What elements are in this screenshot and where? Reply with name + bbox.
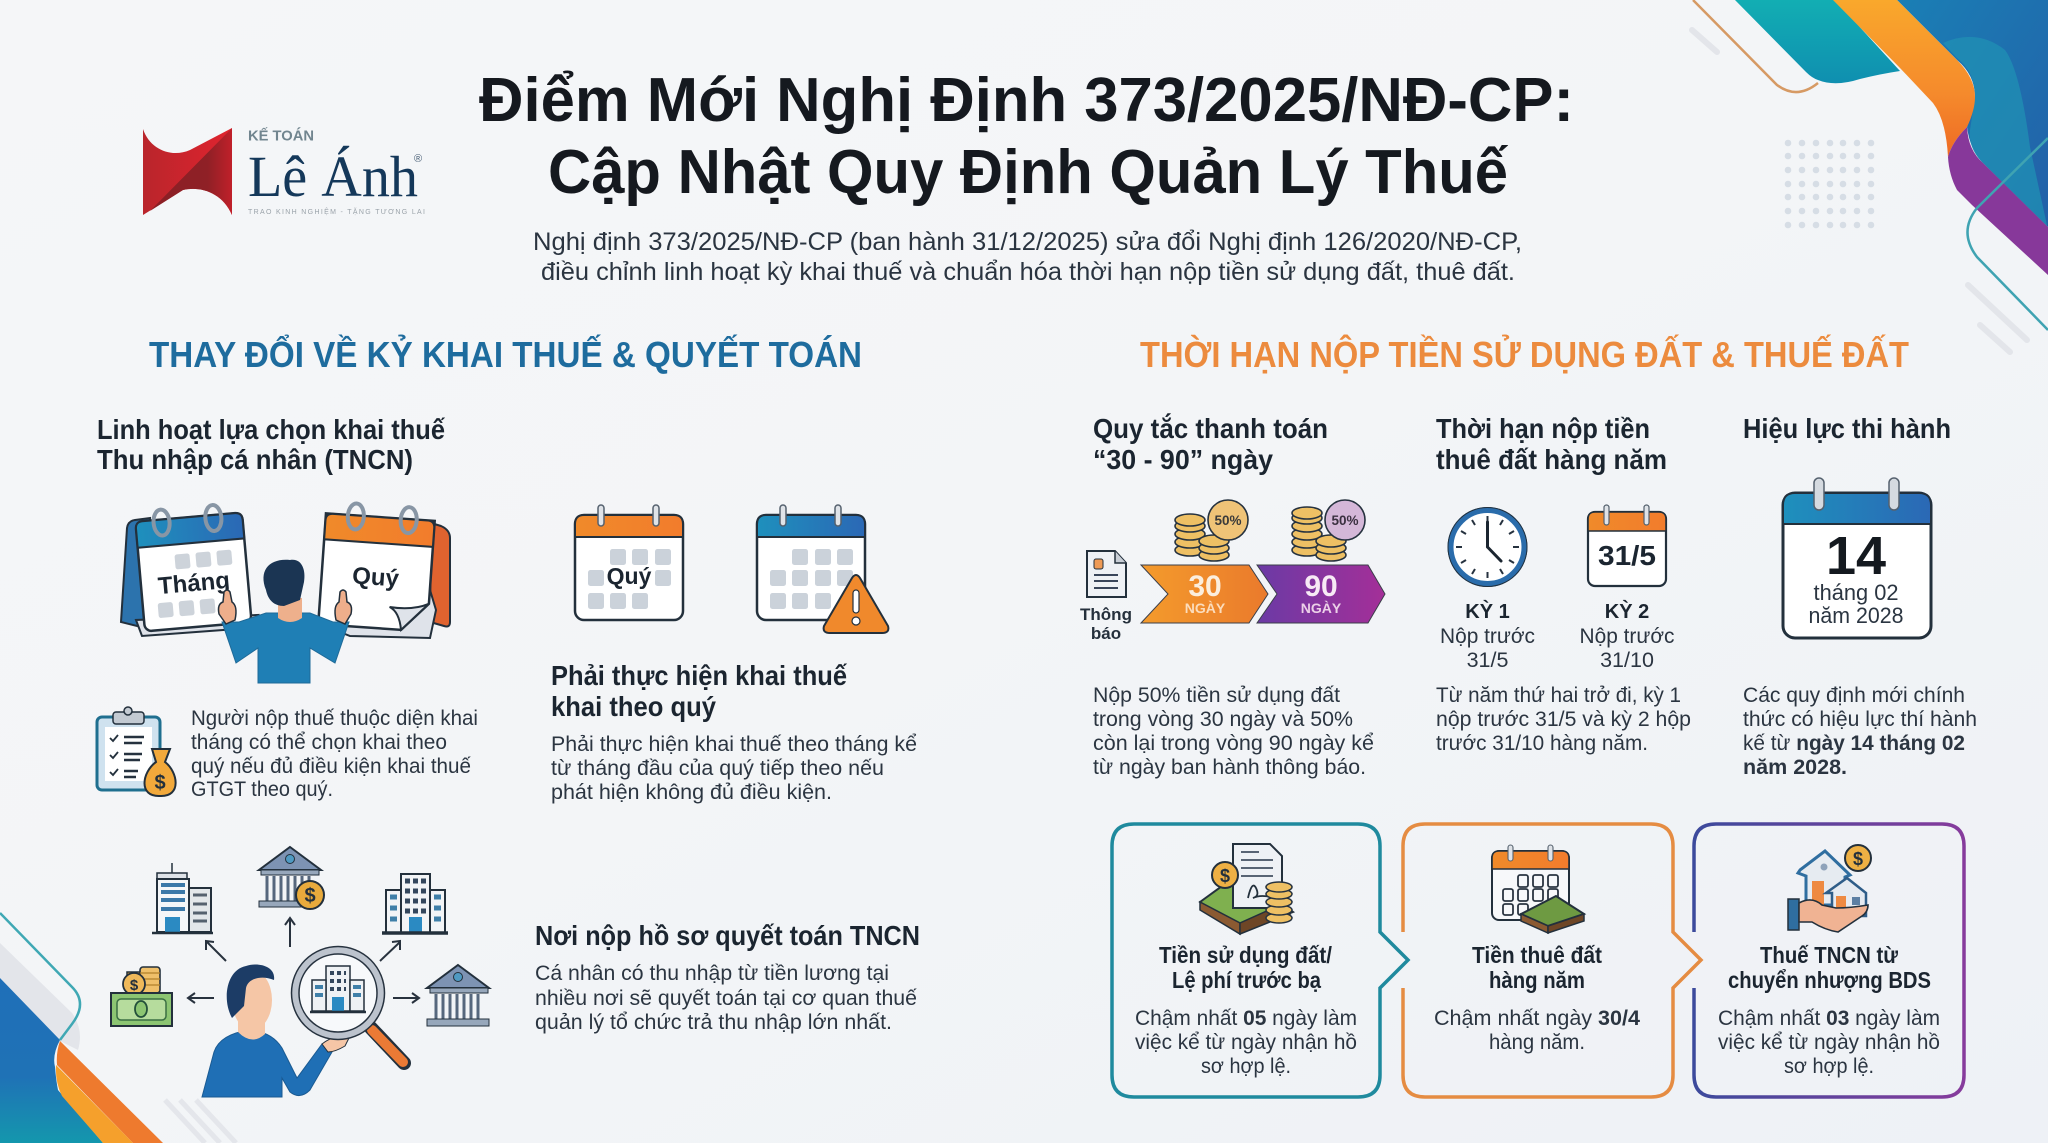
subtitle: điều chỉnh linh hoạt kỳ khai thuế và chuẩn hóa thời hạn nộp tiền sử dụng đất, thuê đất. <box>541 258 1515 286</box>
icon: bank with coin <box>259 847 324 909</box>
title: Cập Nhật Quy Định Quản Lý Thuế <box>548 138 1508 207</box>
icon: house on hand with coin <box>1788 845 1871 932</box>
icon: coins 50% second payment <box>1292 500 1365 561</box>
decoration: bottom-left corner shapes <box>0 913 236 1143</box>
panel: land use fee / registration fee: Chậm nhất 05 ngày làm <box>1135 1006 1357 1030</box>
icon: effective date calendar: tháng 02 <box>1814 580 1898 605</box>
panel: land use fee / registration fee <box>1112 824 1408 1097</box>
icon: house on hand with coin: $ <box>1853 849 1863 869</box>
block heading: 30-90 rule: “30 - 90” ngày <box>1093 444 1273 475</box>
title <box>479 66 1574 207</box>
panel: land use fee / registration fee: sơ hợp lệ. <box>1201 1054 1291 1078</box>
block heading: annual land rent deadline <box>1436 413 1667 475</box>
text: flexible filing description: GTGT theo quý. <box>191 777 333 801</box>
text: 30-90 rule description: còn lại trong vòng 90 ngày kể <box>1093 731 1374 755</box>
icon: cash and coins: $ <box>130 977 139 994</box>
icon: clock <box>1448 508 1527 586</box>
logo: Kế toán Lê Ánh: TRAO KINH NGHIỆM - TẶNG TƯƠNG LAI <box>248 207 425 216</box>
subtitle <box>533 228 1522 286</box>
labels: payment terms 1 and 2: 31/10 <box>1600 648 1654 672</box>
icon: bank <box>427 965 489 1026</box>
panel: annual land rent: hàng năm. <box>1489 1030 1585 1054</box>
logo: Kế toán Lê Ánh: ® <box>414 153 422 165</box>
block: must file monthly: từ tháng đầu của quý tiếp theo nếu <box>551 756 884 780</box>
panel: PIT from real estate transfer: chuyển nhượng BDS <box>1728 967 1931 993</box>
block: where to submit PIT settlement: nhiều nơi sẽ quyết toán tại cơ quan thuế <box>535 986 917 1010</box>
block: must file monthly: khai theo quý <box>551 691 716 722</box>
block heading: flexible PIT filing: Thu nhập cá nhân (TNCN) <box>97 444 413 475</box>
labels: payment terms 1 and 2 <box>1440 599 1675 672</box>
labels: payment terms 1 and 2: Nộp trước <box>1580 624 1675 648</box>
title: Điểm Mới Nghị Định 373/2025/NĐ-CP: <box>479 66 1574 135</box>
block: must file monthly <box>551 660 917 804</box>
icon: land, document and coins: $ <box>1220 866 1230 886</box>
block: must file monthly: Phải thực hiện khai thuế theo tháng kể <box>551 732 917 756</box>
decoration: dot grid <box>1785 140 1874 228</box>
block heading: annual land rent deadline: Thời hạn nộp tiền <box>1436 413 1650 444</box>
labels: payment terms 1 and 2: Nộp trước <box>1440 624 1535 648</box>
decoration: top-right corner shapes <box>1692 0 2048 352</box>
icon: effective date calendar <box>1783 478 1931 638</box>
text: effective date description: năm 2028. <box>1743 755 1847 779</box>
panel: PIT from real estate transfer <box>1694 824 1964 1097</box>
panel: PIT from real estate transfer: việc kể từ ngày nhận hồ <box>1718 1030 1940 1054</box>
text: 30-90 rule description: Nộp 50% tiền sử dụng đất <box>1093 683 1340 707</box>
icon: coins 50% second payment: 50% <box>1331 513 1359 528</box>
text: effective date description: kế từ ngày 14 tháng 02 <box>1743 731 1965 755</box>
block: must file monthly: Phải thực hiện khai thuế <box>551 660 847 691</box>
block heading: 30-90 rule: Quy tắc thanh toán <box>1093 413 1328 444</box>
text: flexible filing description: tháng có thể chọn khai theo <box>191 730 447 754</box>
block: where to submit PIT settlement: Nơi nộp hồ sơ quyết toán TNCN <box>535 920 920 951</box>
icon: office tower <box>152 863 213 933</box>
arrow: 30 days <box>1141 565 1268 623</box>
panel: land use fee / registration fee: việc kể từ ngày nhận hồ <box>1135 1030 1357 1054</box>
block: where to submit PIT settlement: quản lý tổ chức trả thu nhập lớn nhất. <box>535 1010 892 1034</box>
icon: coins 50% first payment <box>1175 500 1248 561</box>
block: must file monthly: phát hiện không đủ điều kiện. <box>551 780 832 804</box>
logo: Kế toán Lê Ánh: Lê Ánh <box>248 144 418 209</box>
text: flexible filing description: Người nộp thuế thuộc diện khai <box>191 706 478 730</box>
icon: quarter calendar <box>575 505 683 620</box>
panel: annual land rent: hàng năm <box>1489 967 1585 993</box>
panel: annual land rent <box>1403 824 1701 1097</box>
diagram: notice, 30 days and 90 days <box>1080 500 1385 643</box>
arrow: 90 days <box>1257 565 1385 623</box>
text: 30-90 rule description <box>1093 683 1374 779</box>
panel: PIT from real estate transfer: sơ hợp lệ. <box>1784 1054 1874 1078</box>
icon: effective date calendar: 14 <box>1826 526 1886 586</box>
icon: calendar 31/5 <box>1588 505 1666 586</box>
icon: quarter calendar: Quý <box>607 563 652 589</box>
panel: PIT from real estate transfer: Chậm nhất 03 ngày làm <box>1718 1006 1940 1030</box>
icon: checklist with money bag <box>97 707 176 796</box>
icon: land, document and coins <box>1200 844 1293 934</box>
panel: land use fee / registration fee: Lệ phí trước bạ <box>1172 967 1321 993</box>
icon: notice document: Thông <box>1080 605 1132 624</box>
arrow: 30 days: 30 <box>1188 570 1222 603</box>
arrow: 90 days: 90 <box>1304 570 1338 603</box>
panel: annual land rent: Tiền thuê đất <box>1472 942 1602 968</box>
text: effective date description <box>1743 683 1977 779</box>
icon: checklist with money bag: $ <box>154 772 166 794</box>
magnifier <box>371 1028 404 1063</box>
block heading: annual land rent deadline: thuê đất hàng năm <box>1436 444 1667 475</box>
block heading: flexible PIT filing <box>97 414 445 475</box>
illustration: person choosing month or quarter calendar <box>121 501 450 683</box>
logo: Kế toán Lê Ánh <box>143 128 425 216</box>
arrow: 90 days: NGÀY <box>1301 600 1342 616</box>
icon: cash and coins <box>111 967 172 1026</box>
labels: payment terms 1 and 2: 31/5 <box>1467 648 1508 672</box>
illustration: person with magnifier, buildings and arrows <box>111 847 489 1097</box>
illustration: person choosing month or quarter calendar: Tháng <box>157 567 231 600</box>
icon: effective date calendar: năm 2028 <box>1808 603 1904 628</box>
icon: calendar and land plot <box>1492 845 1584 933</box>
text: annual rent description: nộp trước 31/5 và kỳ 2 hộp <box>1436 707 1691 731</box>
block heading: flexible PIT filing: Linh hoạt lựa chọn khai thuế <box>97 414 445 445</box>
text: annual rent description <box>1436 683 1691 755</box>
subtitle: Nghị định 373/2025/NĐ-CP (ban hành 31/12/2025) sửa đổi Nghị định 126/2020/NĐ-CP, <box>533 228 1522 256</box>
text: flexible filing description: quý nếu đủ điều kiện khai thuế <box>191 754 471 778</box>
panel: land use fee / registration fee: Tiền sử dụng đất/ <box>1159 942 1333 968</box>
text: flexible filing description <box>191 706 478 801</box>
icon: office building <box>382 874 448 933</box>
arrow: 30 days: NGÀY <box>1185 600 1226 616</box>
icon: calendar with warning triangle <box>757 505 888 633</box>
icon: bank with coin: $ <box>304 885 316 907</box>
block heading: 30-90 rule <box>1093 413 1328 475</box>
logo: Kế toán Lê Ánh: KẾ TOÁN <box>248 128 314 144</box>
icon: calendar 31/5: 31/5 <box>1598 540 1656 571</box>
heading: right section: THỜI HẠN NỘP TIỀN SỬ DỤNG ĐẤT & THUẾ ĐẤT <box>1140 333 1909 375</box>
text: 30-90 rule description: trong vòng 30 ngày và 50% <box>1093 707 1353 731</box>
text: annual rent description: Từ năm thứ hai trở đi, kỳ 1 <box>1436 683 1681 707</box>
text: effective date description: Các quy định mới chính <box>1743 683 1965 707</box>
heading: left section: THAY ĐỔI VỀ KỶ KHAI THUẾ & QUYẾT TOÁN <box>149 332 862 375</box>
person <box>202 1030 332 1097</box>
text: annual rent description: trước 31/10 hàng năm. <box>1436 731 1648 755</box>
icon: notice document: báo <box>1091 624 1121 643</box>
arrows from person to offices <box>188 918 419 1003</box>
icon: notice document <box>1080 551 1132 643</box>
panel: PIT from real estate transfer: Thuế TNCN từ <box>1760 942 1898 968</box>
block: where to submit PIT settlement <box>535 920 920 1034</box>
block heading: effective date: Hiệu lực thi hành <box>1743 413 1951 444</box>
text: effective date description: thức có hiệu lực thí hành <box>1743 707 1977 731</box>
illustration: person choosing month or quarter calendar: Quý <box>351 562 400 593</box>
labels: payment terms 1 and 2: KỲ 1 <box>1465 599 1510 623</box>
text: 30-90 rule description: từ ngày ban hành thông báo. <box>1093 755 1366 779</box>
labels: payment terms 1 and 2: KỲ 2 <box>1605 599 1649 623</box>
block: where to submit PIT settlement: Cá nhân có thu nhập từ tiền lương tại <box>535 961 889 985</box>
icon: coins 50% first payment: 50% <box>1214 513 1242 528</box>
panel: annual land rent: Chậm nhất ngày 30/4 <box>1434 1006 1640 1030</box>
